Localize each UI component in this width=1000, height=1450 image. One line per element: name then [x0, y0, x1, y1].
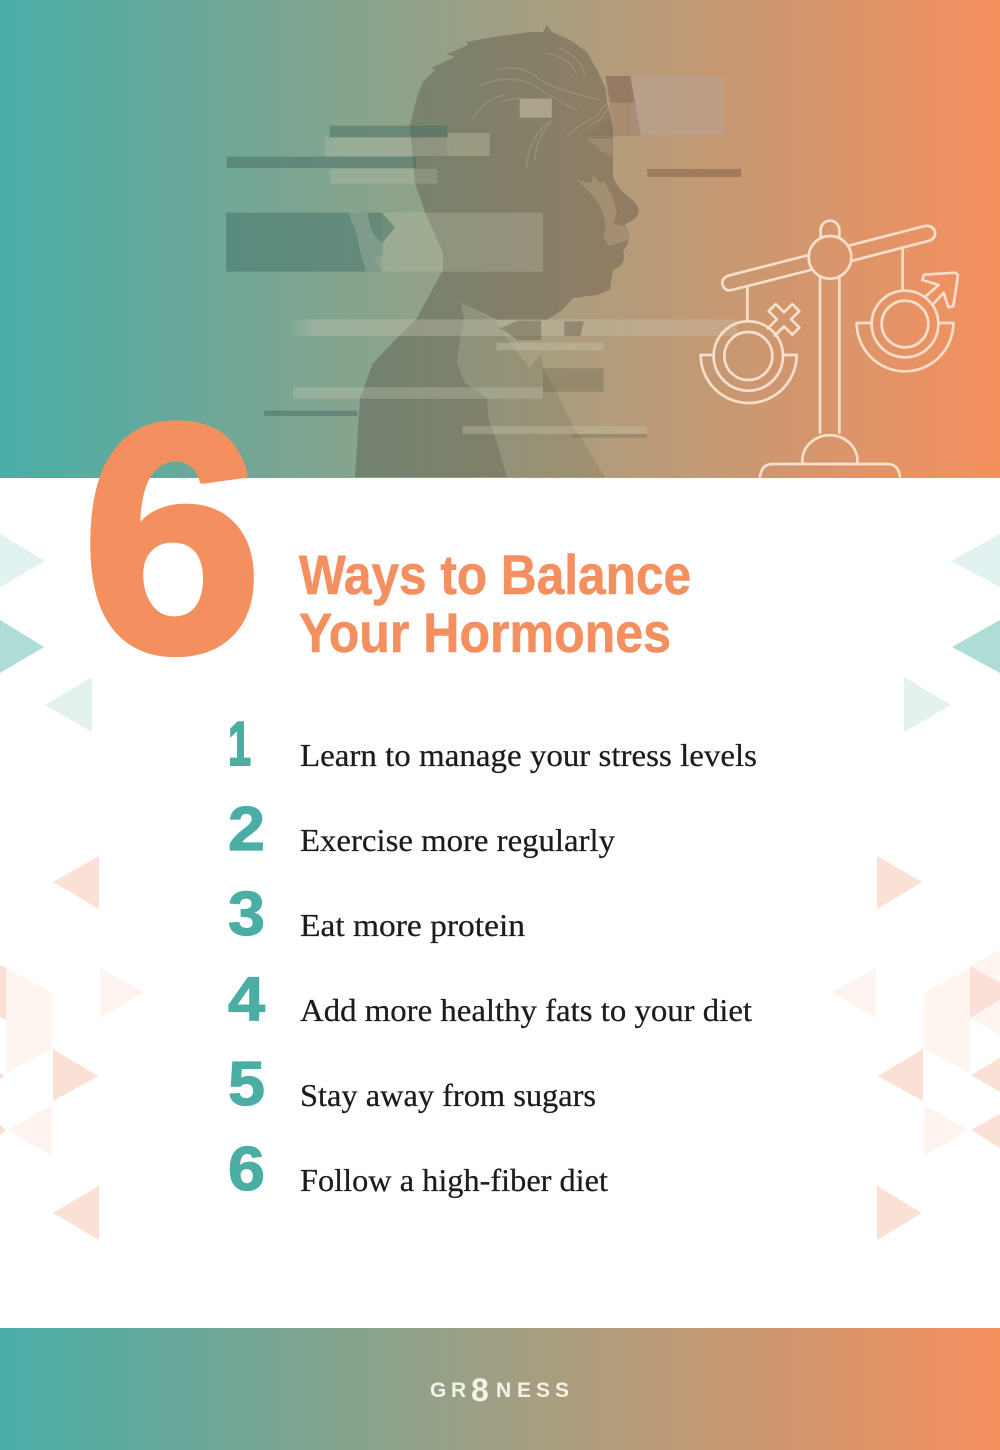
decorative triangles: left [0, 534, 144, 1240]
scale pivot [809, 236, 851, 279]
item 4: 4 [228, 965, 266, 1034]
item 4: Add more healthy fats to your diet [300, 992, 752, 1028]
item 3 [228, 880, 525, 949]
list: six ways [228, 710, 757, 1204]
face highlight [577, 174, 628, 246]
item 2 [228, 795, 615, 864]
item 6 [228, 1135, 608, 1204]
white content panel [0, 478, 1000, 1328]
item 6: Follow a high-fiber diet [300, 1162, 608, 1198]
footer logo: 8 [471, 1372, 489, 1408]
item 1: Learn to manage your stress levels [300, 737, 757, 773]
scale post [820, 221, 839, 433]
silhouette: chest and neck [457, 303, 605, 477]
forehead highlight [587, 138, 613, 157]
item 1: 1 [228, 710, 251, 779]
item 1 [228, 710, 757, 779]
face and hair details [473, 48, 628, 246]
item 5: Stay away from sugars [300, 1077, 596, 1113]
female symbol pan [701, 287, 808, 403]
scale beam [722, 226, 935, 290]
silhouette: head and shoulders [355, 25, 639, 477]
scale base [760, 435, 900, 477]
item 2: 2 [228, 795, 265, 864]
item 6: 6 [228, 1135, 265, 1204]
item 5 [228, 1050, 596, 1119]
male symbol pan [857, 249, 958, 371]
title: Ways to Balance [299, 543, 691, 606]
item 2: Exercise more regularly [300, 822, 615, 858]
item 3: 3 [228, 880, 265, 949]
item 4 [228, 965, 752, 1034]
hair strands [473, 48, 617, 167]
icon: balance scale with gender symbols [701, 221, 958, 477]
header gradient banner [0, 0, 1000, 478]
item 3: Eat more protein [300, 907, 525, 943]
footer logo [430, 1372, 569, 1408]
item 5: 5 [228, 1050, 265, 1119]
title: Your Hormones [299, 601, 671, 664]
illustration: glitched head silhouette [226, 25, 741, 477]
footer logo: GRNESS [430, 1379, 569, 1402]
big numeral 6: 6 [81, 357, 263, 721]
glitch bars [226, 76, 741, 438]
decorative triangles: right [832, 534, 1000, 1240]
title [299, 543, 691, 664]
footer gradient bar [0, 1328, 1000, 1450]
